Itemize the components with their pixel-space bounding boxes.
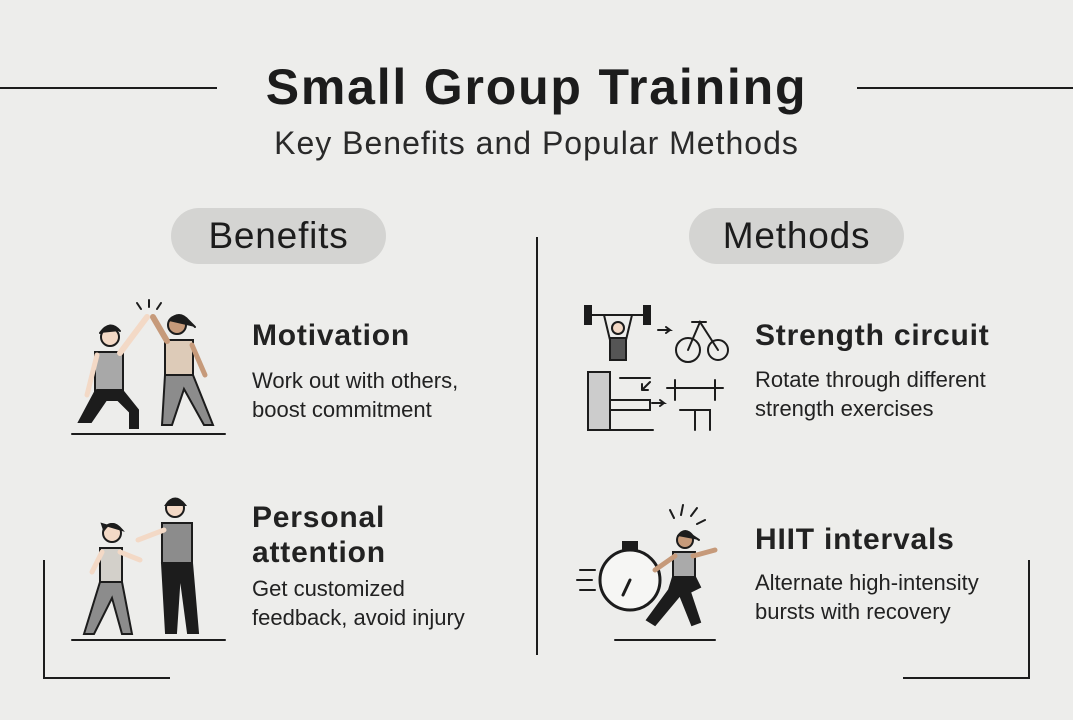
icon: HIIT runner with stopwatch bbox=[576, 504, 718, 641]
text: Personal attention: Personal bbox=[252, 501, 385, 534]
pill: Benefits: Benefits bbox=[208, 215, 349, 256]
title: Small Group Training bbox=[266, 59, 807, 115]
text: HIIT intervals: HIIT intervals bbox=[755, 523, 955, 556]
text: Motivation: boost commitment bbox=[252, 397, 432, 422]
subtitle: Key Benefits and Popular Methods bbox=[274, 125, 799, 161]
text: Motivation bbox=[252, 319, 458, 422]
text: Personal attention bbox=[252, 501, 465, 630]
pill: Methods: Methods bbox=[723, 215, 870, 256]
text: Strength circuit: Rotate through different bbox=[755, 367, 986, 392]
text: Strength circuit: Strength circuit bbox=[755, 319, 990, 352]
icon: high five bbox=[71, 299, 226, 435]
text: HIIT intervals: bursts with recovery bbox=[755, 599, 951, 624]
pill: Benefits bbox=[171, 208, 386, 264]
text: Motivation: Motivation bbox=[252, 319, 410, 352]
text: Personal attention: attention bbox=[252, 536, 386, 569]
text: Strength circuit bbox=[755, 319, 990, 421]
text: HIIT intervals: Alternate high-intensity bbox=[755, 570, 979, 595]
icon: coach and trainee bbox=[71, 498, 226, 641]
text: Strength circuit: strength exercises bbox=[755, 396, 934, 421]
text: Motivation: Work out with others, bbox=[252, 368, 458, 393]
text: Personal attention: feedback, avoid injury bbox=[252, 605, 465, 630]
text: Personal attention: Get customized bbox=[252, 576, 405, 601]
icon: strength circuit bbox=[584, 305, 729, 431]
text: HIIT intervals bbox=[755, 523, 979, 624]
pill: Methods bbox=[689, 208, 904, 264]
